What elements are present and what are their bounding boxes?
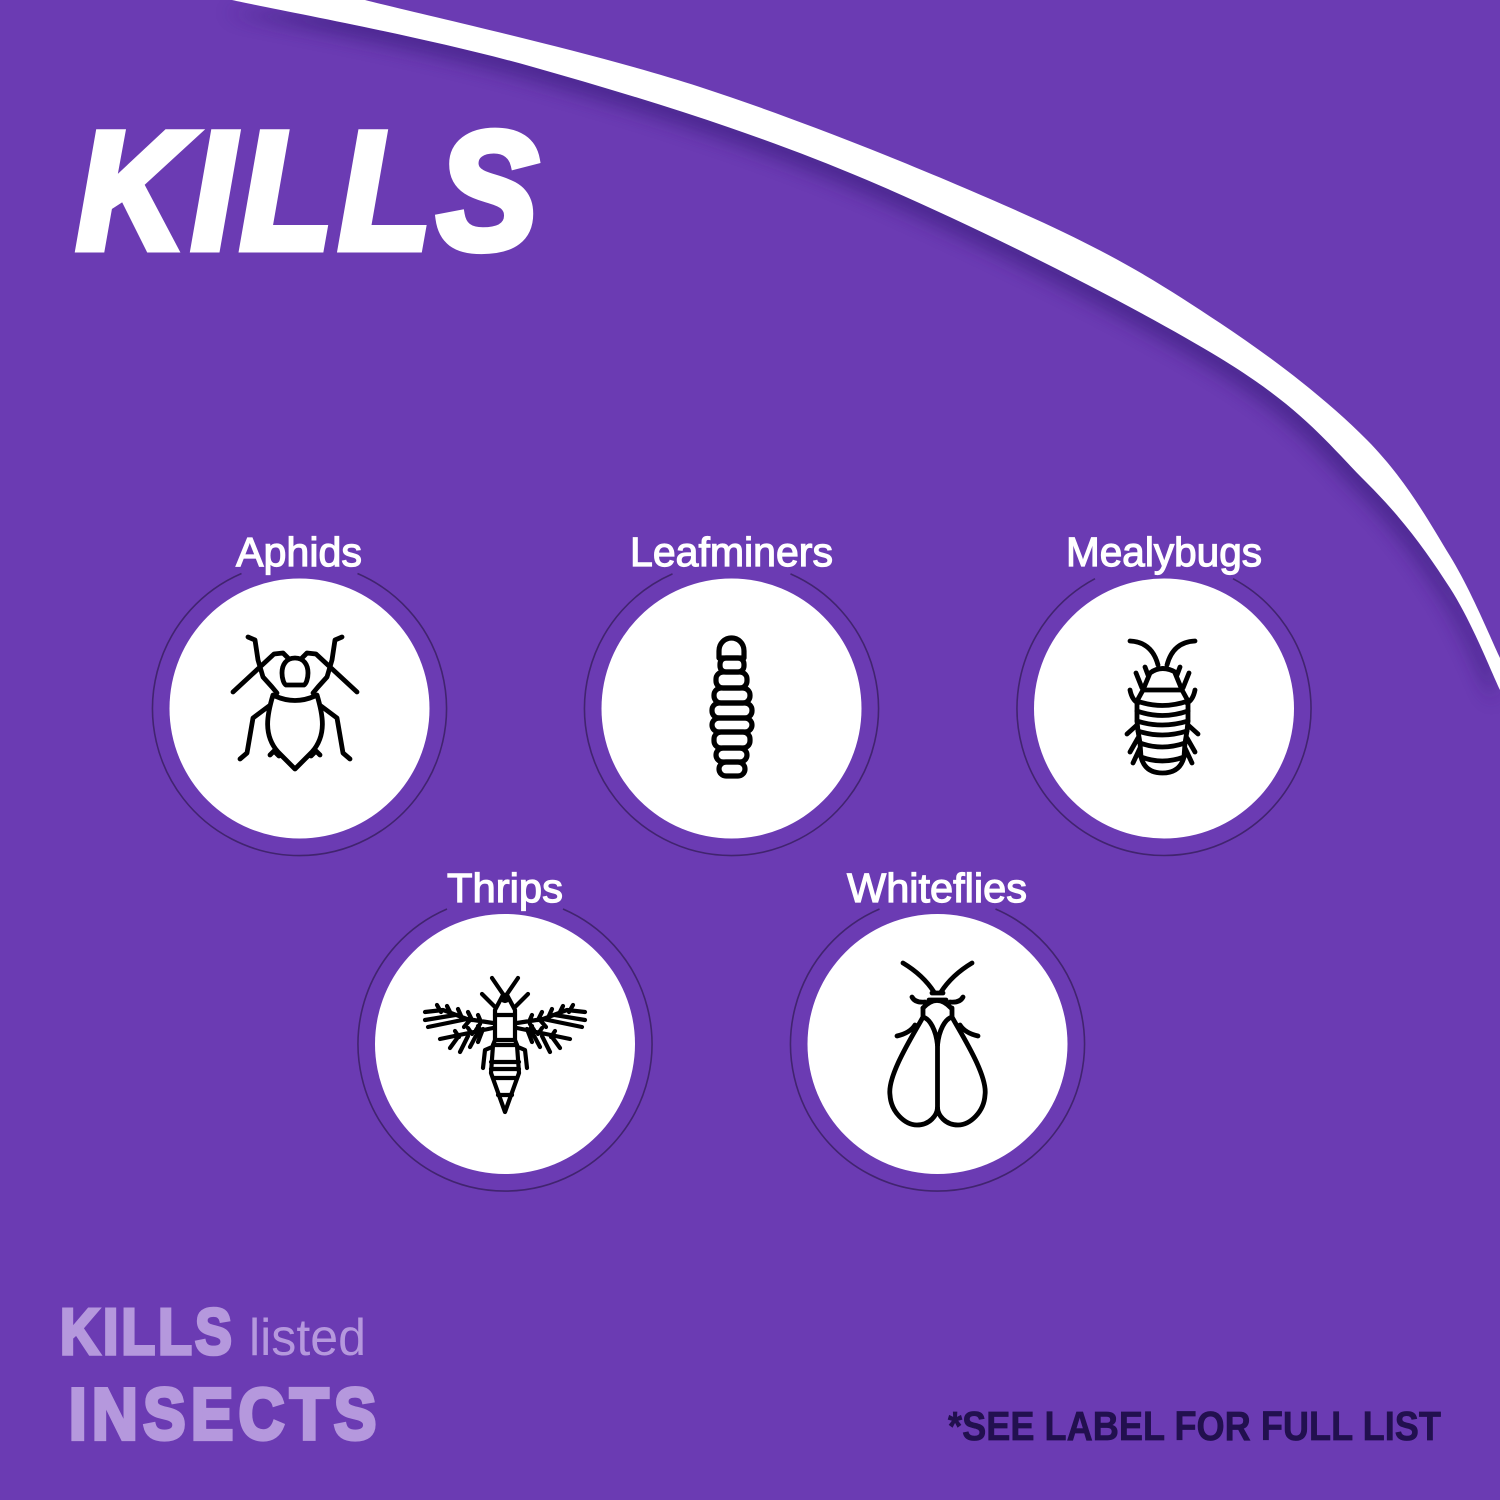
label: mealybugs: Mealybugs bbox=[1066, 529, 1262, 575]
icon: mealybug bbox=[1127, 641, 1198, 773]
disc: leafminers bbox=[602, 578, 862, 838]
badge word: listed: listed bbox=[249, 1309, 366, 1367]
disc: aphids bbox=[170, 578, 430, 838]
ring: thrips bbox=[358, 909, 652, 1191]
ring: mealybugs bbox=[1017, 579, 1311, 855]
disc: mealybugs bbox=[1034, 578, 1294, 838]
panel: mealybugs bbox=[1017, 529, 1311, 855]
panel: whiteflies bbox=[790, 865, 1084, 1191]
title: KILLS bbox=[77, 99, 545, 284]
icon: aphid bbox=[233, 637, 357, 769]
badge: kills listed insects bbox=[60, 1295, 382, 1455]
label: whiteflies: Whiteflies bbox=[847, 865, 1027, 911]
disc: whiteflies bbox=[808, 914, 1068, 1174]
icon: leafminer larva bbox=[712, 638, 752, 776]
ring: leafminers bbox=[584, 574, 878, 856]
panel: aphids bbox=[152, 529, 447, 856]
white swoosh curve bbox=[225, 0, 1500, 702]
label: thrips: Thrips bbox=[447, 865, 563, 911]
footnote: *SEE LABEL FOR FULL LIST bbox=[948, 1403, 1441, 1449]
label: leafminers: Leafminers bbox=[630, 529, 833, 575]
icon: whitefly bbox=[890, 963, 985, 1125]
panel: thrips bbox=[358, 865, 652, 1191]
icon: thrips bbox=[425, 978, 585, 1112]
badge word: insects: INSECTS bbox=[69, 1375, 382, 1455]
ring: aphids bbox=[152, 574, 447, 856]
label: aphids: Aphids bbox=[236, 529, 362, 575]
disc: thrips bbox=[375, 914, 635, 1174]
ring: whiteflies bbox=[790, 909, 1084, 1191]
badge word: kills: KILLS bbox=[60, 1295, 235, 1368]
panel: leafminers bbox=[584, 529, 878, 856]
